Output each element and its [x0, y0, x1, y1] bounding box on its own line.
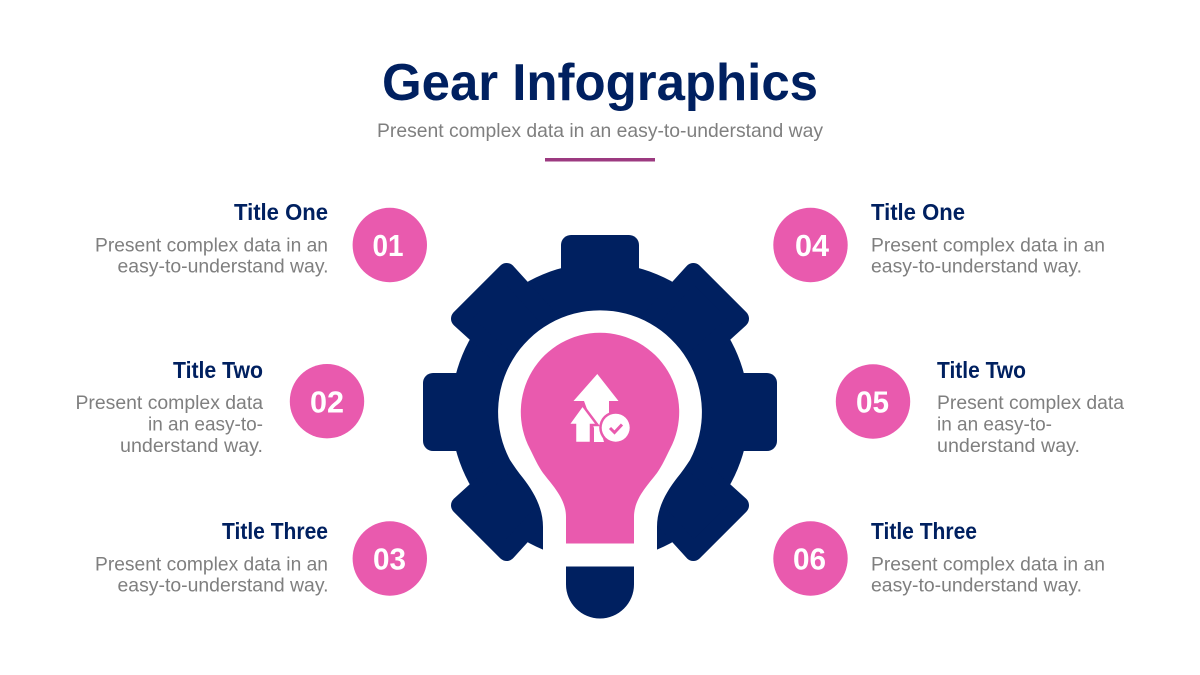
item 05 [836, 357, 1124, 457]
bulb cutout [498, 310, 702, 640]
title underline accent [545, 158, 655, 162]
item 03 [95, 518, 427, 596]
description 01 [95, 236, 328, 278]
bulb glass [521, 333, 679, 544]
gear [423, 235, 777, 589]
badge 04 [773, 208, 848, 282]
description 05 [937, 393, 1124, 457]
description 03: easy-to-understand way. [118, 576, 328, 596]
description 02 [76, 393, 263, 457]
badge 02 [290, 364, 364, 438]
badge 05: 05 [856, 384, 889, 420]
description 06: Present complex data in an [871, 554, 1105, 576]
item 06 [773, 518, 1105, 596]
description 05: understand way. [937, 436, 1080, 457]
badge 01 [353, 208, 427, 282]
heading: title two right: Title Two [937, 357, 1026, 383]
badge 05 [836, 364, 910, 439]
description 05: in an easy-to- [937, 414, 1052, 436]
description 06 [871, 554, 1105, 596]
item 02 [76, 357, 364, 457]
bulb base [566, 566, 634, 618]
title: Gear Infographics [382, 54, 818, 112]
heading: title two: Title Two [173, 357, 263, 383]
description 03 [95, 554, 328, 596]
item 04 [773, 199, 1105, 282]
badge 04: 04 [795, 228, 830, 263]
heading: title one right: Title One [871, 199, 965, 225]
gear with lightbulb [423, 235, 777, 640]
description 02: in an easy-to- [148, 414, 263, 436]
description 01: Present complex data in an [95, 236, 328, 256]
description 04: Present complex data in an [871, 236, 1105, 256]
badge 06 [773, 521, 848, 596]
description 02: understand way. [120, 436, 263, 457]
icon: arrows and check badge [568, 374, 632, 444]
subtitle: Present complex data in an easy-to-understand way [377, 120, 823, 142]
description 04 [871, 236, 1105, 278]
badge 01: 01 [372, 228, 404, 263]
description 01: easy-to-understand way. [118, 256, 328, 278]
heading: title three right: Title Three [871, 518, 977, 544]
badge 06: 06 [793, 542, 826, 576]
heading: title three: Title Three [222, 518, 328, 544]
description 02: Present complex data [76, 393, 263, 414]
item 01 [95, 199, 427, 282]
description 03: Present complex data in an [95, 554, 328, 576]
badge 02: 02 [310, 384, 344, 420]
description 06: easy-to-understand way. [871, 576, 1082, 596]
heading: title one: Title One [234, 199, 328, 225]
description 04: easy-to-understand way. [871, 256, 1082, 278]
badge 03: 03 [373, 542, 406, 576]
badge 03 [353, 521, 427, 596]
description 05: Present complex data [937, 393, 1124, 414]
